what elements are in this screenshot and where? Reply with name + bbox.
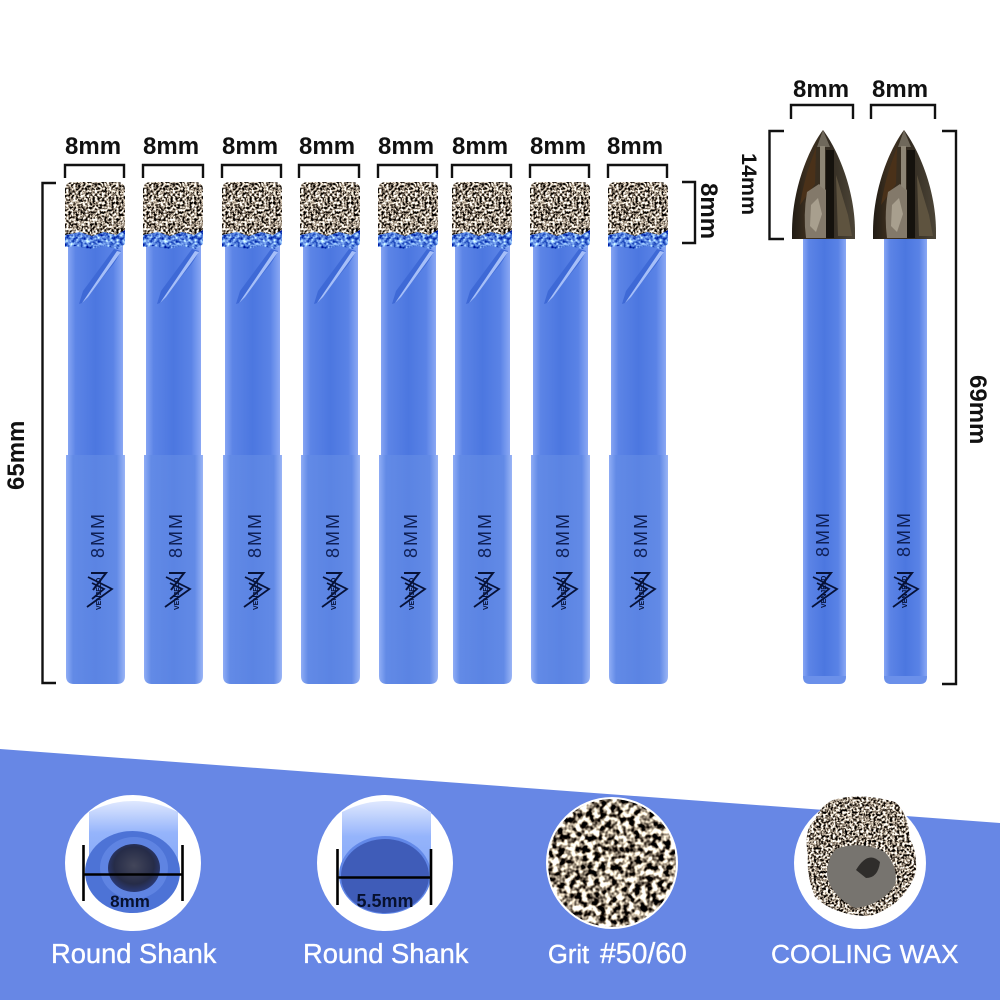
drill bit 5	[378, 182, 438, 684]
dimension: 8mm head height	[682, 182, 722, 243]
drill bit 8: 8MM	[631, 512, 651, 558]
dimension 6: 8mm	[452, 133, 508, 160]
detail: hollow shank end	[65, 795, 201, 931]
drill bit 3: VENJELD	[253, 578, 260, 610]
dimension: 65mm length	[3, 183, 56, 683]
dimension 6	[452, 133, 511, 178]
spear bit 1	[792, 130, 855, 684]
drill bit 6: VENJELD	[483, 578, 490, 610]
drill bit 7: 8MM	[553, 512, 573, 558]
drill bit 2: VENJELD	[174, 578, 181, 610]
dimension: 69mm	[942, 131, 991, 684]
drill bit 6	[452, 182, 512, 684]
dimension: spear width 1	[791, 76, 853, 119]
dimension 4: 8mm	[299, 133, 355, 160]
detail: solid shank end: 5.5mm	[356, 891, 414, 911]
spear bit 2	[873, 130, 936, 684]
drill bit 7: VENJELD	[561, 578, 568, 610]
detail: hollow shank end: 8mm	[110, 892, 150, 911]
dimension 7: 8mm	[530, 133, 586, 160]
blue footer band	[0, 749, 1000, 1000]
drill bit 5: VENJELD	[409, 578, 416, 610]
drill bit 3	[222, 182, 282, 684]
dimension: 14mm	[737, 131, 784, 239]
dimension 8	[607, 133, 667, 178]
caption: Grit #50/60: #50/60	[600, 938, 687, 970]
caption: Grit #50/60	[548, 938, 687, 970]
drill bit 7	[530, 182, 590, 684]
detail: grit texture	[546, 797, 678, 929]
dimension 1: 8mm	[65, 133, 121, 160]
drill bit 4: VENJELD	[331, 578, 338, 610]
drill bit 1: 8MM	[88, 512, 108, 558]
spear bit 2: 8MM	[894, 511, 914, 557]
drill bit 2: 8MM	[166, 512, 186, 558]
width dimensions, row of 8mm labels	[65, 133, 667, 178]
dimension 5	[378, 133, 437, 178]
dimension: 69mm: 69mm	[964, 375, 991, 444]
drill bit 8: VENJELD	[639, 578, 646, 610]
dimension 3: 8mm	[222, 133, 278, 160]
caption: Round Shank: Round Shank	[51, 938, 217, 969]
dimension: spear width 1: 8mm	[793, 76, 849, 103]
caption: Round Shank: Round Shank	[303, 938, 469, 969]
dimension 2	[143, 133, 203, 178]
dimension 1	[65, 133, 124, 178]
drill bit 3: 8MM	[245, 512, 265, 558]
drill bit 8	[608, 182, 668, 684]
drill bit 1	[65, 182, 125, 684]
spear bit 2: VENJELD	[902, 576, 909, 608]
drill bit 4	[300, 182, 360, 684]
dimension 2: 8mm	[143, 133, 199, 160]
dimension 4	[299, 133, 359, 178]
dimension: 65mm length: 65mm	[3, 421, 30, 490]
dimension: 8mm head height: 8mm	[695, 183, 722, 239]
drill bit 5: 8MM	[401, 512, 421, 558]
dimension: spear width 2	[871, 76, 935, 119]
drill bit 2	[143, 182, 203, 684]
caption: Grit #50/60: Grit	[548, 941, 589, 969]
dimension 3	[222, 133, 281, 178]
spear-point glass drill bits	[792, 130, 936, 684]
dimension: 14mm: 14mm	[737, 153, 761, 215]
spear bit 1: VENJELD	[821, 576, 828, 608]
dimension: spear width 2: 8mm	[872, 76, 928, 103]
drill bit 6: 8MM	[475, 512, 495, 558]
spear bit 1: 8MM	[813, 511, 833, 557]
drill bit 1: VENJELD	[96, 578, 103, 610]
caption: COOLING WAX: COOLING WAX	[771, 939, 959, 969]
dimension 8: 8mm	[607, 133, 663, 160]
dimension 7	[530, 133, 589, 178]
hollow diamond drill bits row	[65, 182, 668, 684]
detail: solid shank end	[317, 795, 453, 931]
detail: cooling wax	[794, 796, 926, 929]
dimension 5: 8mm	[378, 133, 434, 160]
drill bit 4: 8MM	[323, 512, 343, 558]
